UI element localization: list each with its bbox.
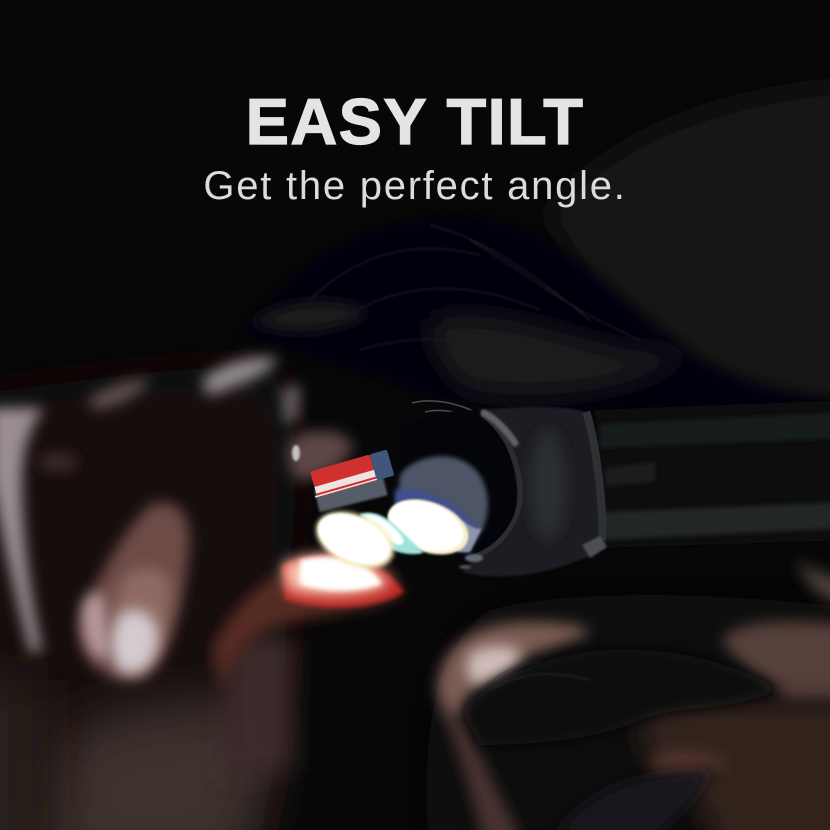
- lens: left: [307, 500, 403, 580]
- eyebrow: [462, 649, 780, 745]
- hair: [235, 215, 830, 425]
- hand: [0, 357, 404, 830]
- lamp mount body: [462, 407, 606, 577]
- headlamp: [307, 407, 607, 580]
- small screw glints: [465, 554, 483, 562]
- lens: right: [380, 489, 476, 565]
- forehead right: [722, 622, 830, 700]
- subtitle: Get the perfect angle.: [203, 164, 627, 208]
- index finger: [80, 502, 190, 681]
- finger behind lamp: [287, 431, 354, 482]
- hair strands: [310, 225, 640, 365]
- beanie hat: [545, 85, 830, 410]
- thumb edge highlight: [0, 408, 44, 652]
- hollow inside ring: [395, 410, 517, 556]
- tilting lamp cone: [395, 456, 488, 552]
- palm shadow: [0, 368, 296, 830]
- temple skin strip: [443, 705, 525, 830]
- face: [427, 562, 830, 830]
- eyelashes: [555, 772, 712, 830]
- headband strap: [595, 400, 830, 548]
- title: EASY TILT: [246, 85, 584, 158]
- nameplate under tab: [314, 474, 388, 512]
- red and white label tab: [308, 450, 394, 498]
- mount rim and knob: [586, 412, 602, 540]
- lower finger with lit fingertip: [212, 554, 402, 690]
- upper finger highlights: [90, 380, 150, 410]
- ring edge: [476, 414, 520, 556]
- lens: centre strip: [360, 513, 423, 554]
- lit brow skin: [437, 622, 590, 725]
